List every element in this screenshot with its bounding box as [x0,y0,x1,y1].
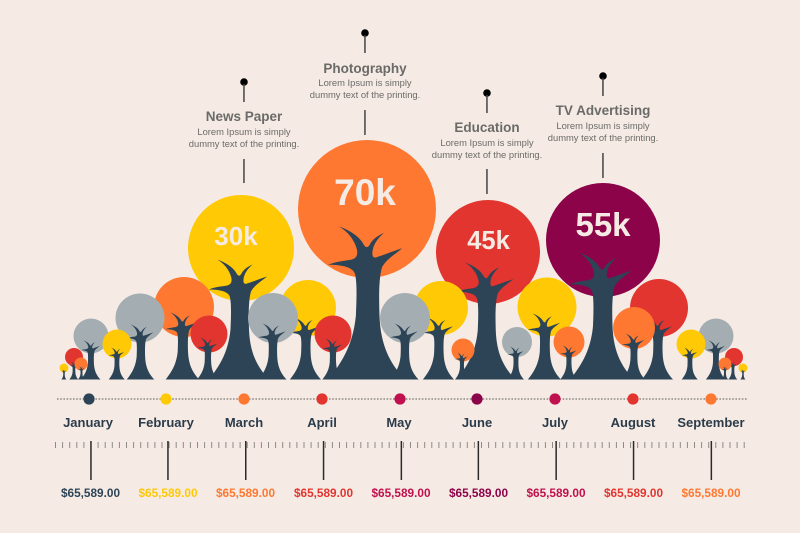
callout: News Paper: dummy text of the printing. [189,138,299,149]
monthly amounts: $65,589.00 [294,486,353,500]
tree: red tiny left [65,348,83,380]
callout: TV Advertising: dummy text of the printing. [548,132,658,143]
callout: Photography: Lorem Ipsum is simply [318,77,412,88]
tree: yellow tiny left [60,364,68,380]
tree: yellow small left [102,330,132,380]
month labels: August [611,415,656,430]
tree: red tiny right [725,348,743,380]
callout: Photography [310,29,420,135]
callout: Education: Education [454,120,520,135]
callout: Photography: dummy text of the printing. [310,89,420,100]
tree: TV Advertising 55k [546,183,660,380]
tree: orange right [613,307,655,380]
callout: Photography: Photography [323,61,407,76]
monthly amounts [61,486,741,500]
monthly amounts: $65,589.00 [371,486,431,500]
callout: Education: Lorem Ipsum is simply [440,137,534,148]
monthly amounts: $65,589.00 [61,486,120,500]
tree: yellow centre [414,281,468,380]
timeline: dotted line and month dots [57,393,747,405]
month labels: March [225,415,263,430]
tree: grey far right [698,318,734,380]
monthly amounts: $65,589.00 [138,486,198,500]
month labels: September [677,415,745,430]
monthly amounts: $65,589.00 [681,486,741,500]
tree: orange small centre [452,338,474,380]
month labels: June [462,415,492,430]
monthly amounts: $65,589.00 [526,486,586,500]
tree: grey left [116,294,164,380]
ruler ticks [55,441,748,480]
month labels: April [307,415,337,430]
callout: Education: dummy text of the printing. [432,149,542,160]
tree: red left [190,316,228,380]
callout: TV Advertising: TV Advertising [556,103,650,118]
tree: red right [630,279,688,380]
month labels: February [138,415,195,430]
monthly amounts: $65,589.00 [449,486,508,500]
tree: orange small right [554,326,584,380]
value: 30k: 30k [214,221,258,251]
monthly amounts: $65,589.00 [216,486,275,500]
month labels: January [63,415,114,430]
callout: News Paper [189,78,299,183]
tree: News Paper 30k [188,195,294,380]
tree: yellow small right [676,330,706,380]
tree: grey far left [74,318,108,380]
callout: Education [432,89,542,194]
tree: red centre left [314,316,352,380]
tree: Education 45k [436,200,540,380]
month labels: July [542,415,569,430]
tree: orange tiny left [74,358,88,380]
callout: News Paper: Lorem Ipsum is simply [197,126,291,137]
tree: grey small centre [502,327,532,380]
tree: orange tiny right [718,358,732,380]
tree: yellow tiny right [738,364,748,380]
value: 45k: 45k [467,227,511,255]
month labels: May [386,415,412,430]
tree: yellow mid right [518,278,576,380]
callout: TV Advertising: Lorem Ipsum is simply [556,120,650,131]
tree: Photography 70k [298,140,436,380]
callout: TV Advertising [548,72,658,178]
tree: orange left [154,277,214,380]
tree: grey centre [380,293,430,380]
value: 70k: 70k [334,172,396,213]
monthly amounts: $65,589.00 [604,486,663,500]
callout: News Paper: News Paper [206,109,283,124]
tree: grey left centre [248,293,298,380]
month labels [63,415,745,430]
value: 55k: 55k [575,206,631,243]
tree: yellow mid left [280,280,336,380]
